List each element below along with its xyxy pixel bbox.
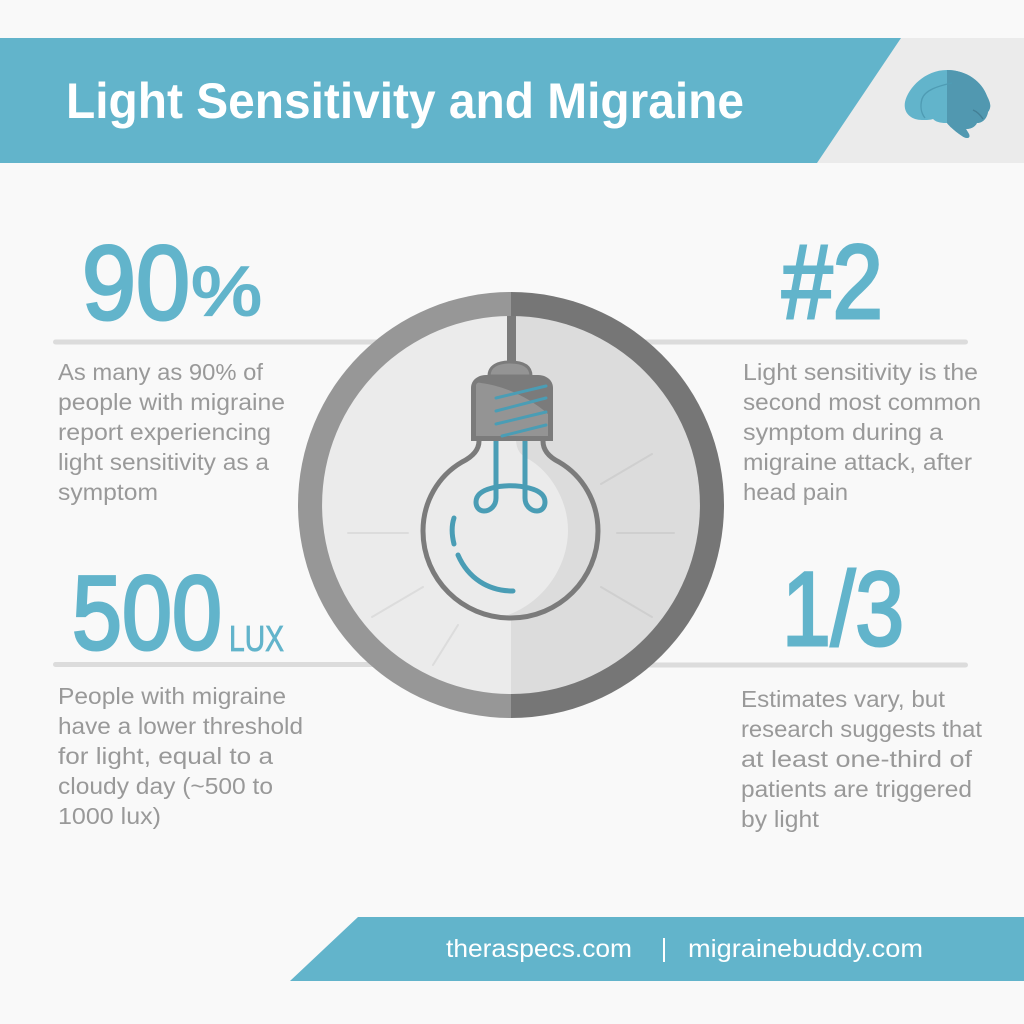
text: 90% description: symptom: [58, 479, 158, 505]
text: 500 lux description: [58, 683, 303, 829]
text: 90% description: [58, 359, 285, 505]
text: 90% description: report experiencing: [58, 419, 271, 445]
text: 1/3 description: by light: [741, 806, 819, 832]
text: 500 lux description: 1000 lux): [58, 803, 161, 829]
text: #2 description: head pain: [743, 479, 848, 505]
text: 90% description: people with migraine: [58, 389, 285, 415]
text: 1/3 description: at least one-third of: [741, 746, 973, 772]
stat: 90%: 90: [82, 225, 190, 342]
stat: 500 lux: LUX: [229, 618, 284, 659]
text: #2 description: second most common: [743, 389, 981, 415]
text: 90% description: light sensitivity as a: [58, 449, 270, 475]
footer text: [446, 935, 923, 963]
cord: [507, 316, 516, 364]
text: 90% description: As many as 90% of: [58, 359, 263, 385]
title: Light Sensitivity and Migraine: [66, 73, 744, 129]
stat: #2: #2: [782, 224, 883, 341]
stat: 1/3: 1/3: [782, 551, 904, 668]
text: 1/3 description: [741, 686, 982, 832]
stat: 90%: %: [191, 252, 262, 330]
stat: 500 lux: 500: [72, 555, 222, 672]
text: #2 description: symptom during a: [743, 419, 944, 445]
text: 500 lux description: for light, equal to a: [58, 743, 274, 769]
icon: brain: [905, 70, 990, 138]
text: 1/3 description: research suggests that: [741, 716, 982, 742]
text: 500 lux description: cloudy day (~500 to: [58, 773, 273, 799]
text: #2 description: [743, 359, 981, 505]
socket: [489, 362, 531, 376]
central dial: [298, 292, 724, 718]
footer band: [290, 917, 1024, 981]
text: 1/3 description: Estimates vary, but: [741, 686, 945, 712]
text: #2 description: migraine attack, after: [743, 449, 972, 475]
footer text: theraspecs.com: [446, 935, 632, 963]
footer text: migrainebuddy.com: [688, 935, 923, 963]
stat: 90%: [82, 225, 262, 342]
dividers: [53, 340, 968, 668]
text: #2 description: Light sensitivity is the: [743, 359, 978, 385]
header band: [0, 38, 1024, 163]
text: 500 lux description: have a lower threshold: [58, 713, 303, 739]
text: 1/3 description: patients are triggered: [741, 776, 972, 802]
filament: [452, 441, 545, 591]
text: 500 lux description: People with migraine: [58, 683, 286, 709]
icon: light bulb: [423, 316, 598, 618]
